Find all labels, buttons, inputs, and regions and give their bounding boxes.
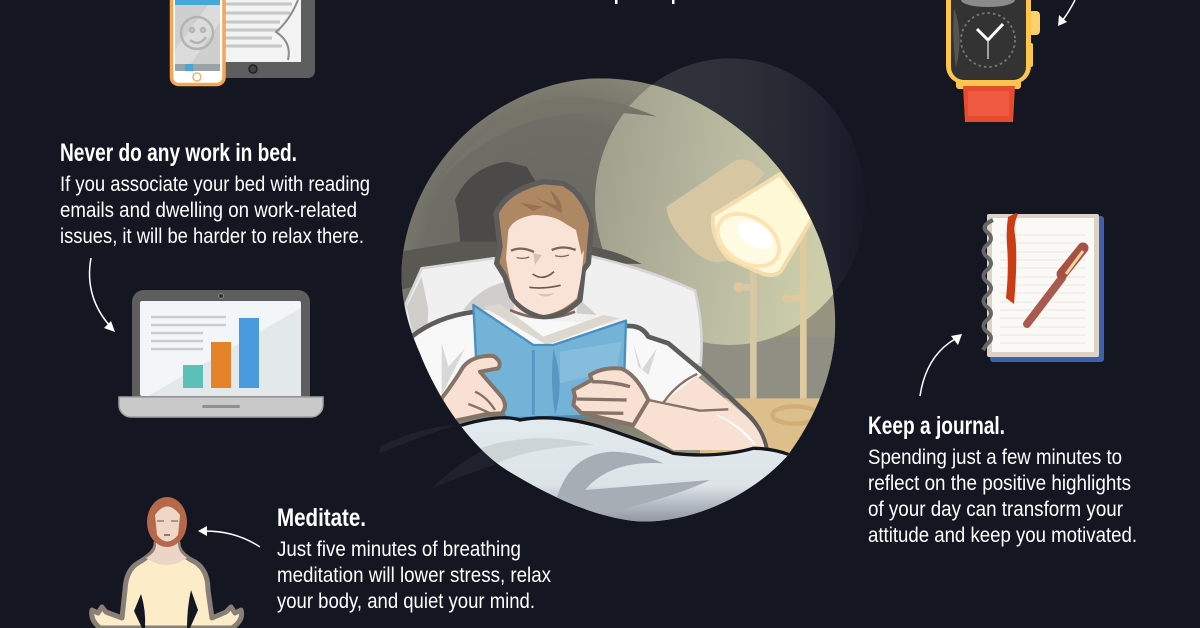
icon: journal and pen	[983, 213, 1104, 362]
ceiling shadow band	[624, 106, 656, 116]
line 1: If you associate your bed with reading	[60, 172, 370, 196]
heading: Meditate.	[277, 504, 366, 532]
strap	[963, 86, 1015, 122]
tablet text lines	[222, 4, 292, 46]
ruled lines	[1000, 235, 1086, 343]
line 4: attitude and keep you motivated.	[868, 523, 1137, 547]
phone home ring	[193, 73, 201, 81]
phone screen sheen	[175, 5, 220, 65]
line 1: Just five minutes of breathing	[277, 537, 521, 561]
tablet screen	[215, 0, 301, 62]
sleeve edge	[648, 374, 728, 411]
floor	[700, 398, 820, 478]
book light panel	[560, 342, 622, 383]
book pages	[483, 304, 620, 345]
text block: keep a journal	[868, 412, 1137, 547]
arrow to journal	[920, 334, 962, 396]
closed eyes	[157, 520, 178, 522]
lit scene	[401, 78, 836, 522]
hair	[147, 497, 187, 547]
head shadow	[455, 162, 537, 250]
torso shirt	[413, 336, 702, 402]
heading: Keep a journal.	[868, 412, 1005, 440]
phone screen	[175, 5, 220, 65]
pen cap	[1062, 248, 1083, 274]
phone active tab	[185, 64, 193, 71]
blanket fold lower	[557, 452, 710, 515]
spiral binding	[983, 220, 993, 350]
mouth	[164, 534, 170, 536]
orange bar	[211, 342, 231, 388]
line 2: meditation will lower stress, relax	[277, 563, 551, 587]
line 2: reflect on the positive highlights	[868, 471, 1131, 495]
head silhouette and hair	[496, 182, 592, 317]
head	[496, 182, 592, 317]
body	[92, 543, 242, 628]
lamp shade	[713, 174, 813, 275]
line 1: Spending just a few minutes to	[868, 445, 1122, 469]
line 3: your body, and quiet your mind.	[277, 589, 535, 613]
line 2: emails and dwelling on work-related	[60, 198, 357, 222]
lamp opening	[716, 212, 782, 268]
wall light pool	[595, 84, 834, 345]
arm highlight	[717, 415, 755, 445]
arrow to laptop	[90, 258, 115, 332]
knobs	[733, 282, 792, 303]
closed eyes	[517, 255, 569, 258]
pen	[1027, 278, 1062, 324]
arrow to watch	[1058, 0, 1075, 26]
blanket	[400, 418, 833, 530]
left sheen	[953, 8, 960, 68]
icon: smart watch	[946, 0, 1040, 122]
pillow folds	[407, 277, 597, 337]
collar	[510, 310, 575, 318]
phone header	[175, 0, 220, 5]
body outline	[412, 312, 767, 450]
wall	[397, 70, 843, 530]
screen shade	[148, 308, 301, 396]
strap inner	[968, 91, 1009, 116]
back cover	[990, 216, 1104, 362]
neck	[514, 304, 576, 314]
trackpad notch	[202, 405, 240, 408]
tablet	[200, 0, 315, 78]
hair strand	[520, 190, 562, 213]
lamp glow outside the scene	[595, 58, 865, 345]
lamp stand	[787, 223, 803, 398]
illustration: man reading in bed lit by lamp	[380, 58, 865, 530]
left hand fingers	[468, 392, 495, 413]
tablet page curl	[276, 0, 298, 60]
arm gaps	[134, 590, 198, 628]
watch case	[946, 0, 1031, 84]
pen clip	[1066, 251, 1083, 274]
laptop screen	[140, 301, 301, 396]
headboard	[400, 242, 642, 290]
text block: meditate	[277, 504, 551, 613]
lamp stand shadow	[738, 270, 753, 398]
crown	[1028, 11, 1040, 35]
right hand	[573, 368, 648, 425]
webcam	[218, 294, 224, 298]
line 3: issues, it will be harder to relax there.	[60, 224, 364, 248]
watch face	[951, 0, 1026, 80]
book spine	[532, 350, 535, 415]
book spine fold	[552, 348, 560, 415]
laptop base	[119, 397, 323, 417]
line 3: of your day can transform your	[868, 497, 1123, 521]
blanket fold	[480, 438, 595, 463]
heading: Never do any work in bed.	[60, 139, 297, 167]
bulb	[738, 221, 772, 249]
brows and eyes	[511, 247, 576, 252]
lip shade	[533, 253, 555, 297]
phone smiley	[181, 17, 213, 49]
hands	[977, 24, 1003, 40]
bookmark	[1006, 213, 1018, 304]
blue bar	[239, 318, 259, 388]
left hand	[442, 356, 505, 423]
book cover	[473, 305, 626, 418]
teal bar	[183, 365, 203, 388]
lamp shadow on wall	[667, 160, 765, 262]
lower wall lift	[696, 336, 835, 402]
laptop lid	[132, 290, 310, 398]
nose and mouth	[529, 272, 561, 288]
second hand	[987, 40, 989, 59]
icon: meditating woman	[92, 497, 242, 628]
clipped text descenders at top edge	[615, 0, 674, 4]
icon: phone and tablet	[172, 0, 315, 84]
neck and chest	[146, 543, 187, 565]
side button	[1029, 43, 1033, 67]
text block: never do any work in bed	[60, 139, 370, 248]
page edge	[987, 214, 1099, 357]
face	[155, 506, 180, 542]
phone tab bar	[175, 64, 220, 71]
faint blanket folds outside the scene	[380, 425, 495, 488]
page	[992, 218, 1094, 352]
icon: laptop with bar chart	[119, 290, 323, 417]
right arm	[634, 376, 764, 450]
dial	[961, 13, 1015, 67]
lamp base	[772, 406, 818, 424]
phone	[172, 0, 224, 84]
arrow to meditating woman	[198, 526, 260, 547]
tablet home button	[249, 65, 257, 73]
pillow	[405, 256, 702, 365]
face	[506, 215, 584, 315]
strap lugs	[956, 78, 1021, 89]
right hand fingers	[577, 382, 630, 413]
text lines	[151, 317, 226, 349]
top sheen	[961, 0, 1015, 7]
shirt folds	[442, 343, 657, 395]
